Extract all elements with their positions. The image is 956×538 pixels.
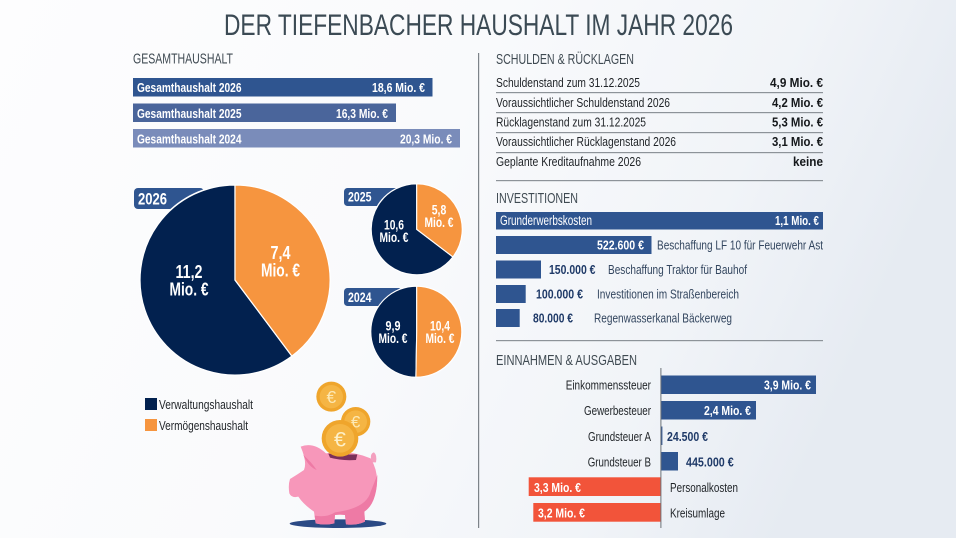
pie chart 2024 xyxy=(344,286,463,378)
bar: Gesamthaushalt 2025: 16,3 Mio. € xyxy=(336,106,388,121)
pie chart 2024: 10,4 xyxy=(430,318,450,334)
row: Einkommensteuer xyxy=(566,376,816,394)
row: Schuldenstand 2025: 4,9 Mio. € xyxy=(770,75,823,90)
row: Voraussichtlicher Rücklagenstand: 3,1 Mio. € xyxy=(772,134,823,149)
bar: Regenwasserkanal: Regenwasserkanal Bäckerweg xyxy=(594,310,732,326)
heading: Schulden und Rücklagen: SCHULDEN & RÜCKLAGEN xyxy=(496,50,634,68)
row: Grundsteuer B: 445.000 € xyxy=(686,454,734,470)
panel: Investitionen xyxy=(496,190,823,327)
bar: Gesamthaushalt 2024 xyxy=(133,129,460,148)
bar: Gesamthaushalt 2026: 18,6 Mio. € xyxy=(372,80,425,95)
pie chart 2025: Mio. € xyxy=(380,229,409,245)
bar: Regenwasserkanal xyxy=(496,309,732,327)
row: Rücklagenstand 2025: 5,3 Mio. € xyxy=(772,114,823,130)
icon: piggy bank with coins: € xyxy=(327,387,337,407)
row: Einkommensteuer: Einkommenssteuer xyxy=(566,378,652,392)
bar: Beschaffung LF 10 xyxy=(496,236,823,254)
row: Gewerbesteuer: Gewerbesteuer xyxy=(584,403,651,418)
row: Voraussichtlicher Schuldenstand: 4,2 Mio. € xyxy=(772,95,823,110)
row: Grundsteuer B: Grundsteuer B xyxy=(588,454,651,470)
bar: Beschaffung Traktor xyxy=(496,260,747,278)
panel: Schulden und Rücklagen xyxy=(496,50,823,169)
legend: Vermögenshaushalt xyxy=(159,418,248,433)
bar: Beschaffung LF 10: 522.600 € xyxy=(597,238,644,252)
heading: Investitionen: INVESTITIONEN xyxy=(496,190,578,207)
row: Personalkosten: 3,3 Mio. € xyxy=(534,480,581,495)
bar: Grunderwerbskosten xyxy=(496,212,823,230)
pie chart 2025: 5,8 xyxy=(432,202,446,218)
row: Kreisumlage: Kreisumlage xyxy=(670,506,725,520)
row: Voraussichtlicher Schuldenstand: Voraussichtlicher Schuldenstand 2026 xyxy=(496,95,670,110)
pie chart 2024: 9,9 xyxy=(386,318,401,334)
pie chart 2026: 11,2 xyxy=(176,262,202,282)
legend: Verwaltungshaushalt xyxy=(159,397,253,412)
divider between columns xyxy=(478,53,479,528)
bar: Investitionen im Straßenbereich xyxy=(496,285,739,303)
legend xyxy=(145,397,253,433)
title: DER TIEFENBACHER HAUSHALT IM JAHR 2026 xyxy=(224,9,733,42)
bar: Grunderwerbskosten: Grunderwerbskosten xyxy=(500,213,592,228)
pie chart 2024: Mio. € xyxy=(378,330,408,346)
bar: Investitionen im Straßenbereich: 100.000 € xyxy=(536,286,583,302)
row: Schuldenstand 2025: Schuldenstand zum 31.12.2025 xyxy=(496,75,640,90)
pie chart 2026: 7,4 xyxy=(270,243,290,263)
row: Grundsteuer A: Grundsteuer A xyxy=(588,429,651,444)
bar: Gesamthaushalt 2026: Gesamthaushalt 2026 xyxy=(137,80,242,95)
row: Voraussichtlicher Schuldenstand xyxy=(496,95,823,110)
year tag 2024: 2024 xyxy=(348,289,372,305)
row: Geplante Kreditaufnahme xyxy=(496,154,823,169)
bar: Grunderwerbskosten: 1,1 Mio. € xyxy=(775,213,819,228)
bar: Gesamthaushalt 2025: Gesamthaushalt 2025 xyxy=(137,106,242,121)
bar: Beschaffung Traktor: 150.000 € xyxy=(549,262,596,277)
heading: Gesamthaushalt: GESAMTHAUSHALT xyxy=(133,50,233,68)
bar: Gesamthaushalt 2026 xyxy=(133,78,432,96)
bar: Gesamthaushalt 2024: Gesamthaushalt 2024 xyxy=(137,132,242,146)
heading: Einnahmen und Ausgaben: EINNAHMEN & AUSGABEN xyxy=(496,352,637,369)
row: Geplante Kreditaufnahme: Geplante Kreditaufnahme 2026 xyxy=(496,154,641,169)
row: Einkommensteuer: 3,9 Mio. € xyxy=(764,378,811,392)
pie chart 2025: 10,6 xyxy=(384,216,404,232)
row: Grundsteuer A: 24.500 € xyxy=(667,429,708,444)
year tag 2025: 2025 xyxy=(348,188,372,204)
bar: Regenwasserkanal: 80.000 € xyxy=(533,310,573,326)
row: Rücklagenstand 2025: Rücklagenstand zum 31.12.2025 xyxy=(496,114,646,130)
row: Gewerbesteuer xyxy=(584,401,756,420)
row: Kreisumlage: 3,2 Mio. € xyxy=(538,506,585,520)
icon: piggy bank with coins: € xyxy=(351,413,361,432)
panel: Gesamthaushalt xyxy=(133,50,460,148)
pie chart 2024: Mio. € xyxy=(426,330,455,346)
pie chart 2025 xyxy=(344,183,463,276)
bar: Beschaffung Traktor: Beschaffung Traktor für Bauhof xyxy=(608,262,747,277)
year tag 2026 xyxy=(134,188,204,209)
bar: Gesamthaushalt 2025 xyxy=(133,104,396,122)
row: Grundsteuer B xyxy=(588,452,734,470)
row: Gewerbesteuer: 2,4 Mio. € xyxy=(704,403,751,418)
pie chart 2026: Mio. € xyxy=(170,280,208,300)
panel: Einnahmen und Ausgaben xyxy=(496,352,816,528)
row: Voraussichtlicher Rücklagenstand xyxy=(496,134,823,149)
row: Voraussichtlicher Rücklagenstand: Voraussichtlicher Rücklagenstand 2026 xyxy=(496,134,676,149)
icon: piggy bank with coins: € xyxy=(334,427,346,451)
year tag 2026: 2026 xyxy=(138,190,167,208)
icon: piggy bank with coins xyxy=(289,382,386,528)
row: Personalkosten xyxy=(529,477,738,496)
bar: Investitionen im Straßenbereich: Investitionen im Straßenbereich xyxy=(597,286,739,302)
pie chart 2026 xyxy=(134,184,331,376)
bar: Beschaffung LF 10: Beschaffung LF 10 für Feuerwehr Ast xyxy=(657,238,823,252)
row: Rücklagenstand 2025 xyxy=(496,114,823,130)
row: Geplante Kreditaufnahme: keine xyxy=(793,154,823,169)
pie chart 2025: Mio. € xyxy=(424,214,454,230)
row: Personalkosten: Personalkosten xyxy=(670,480,738,495)
row: Grundsteuer A xyxy=(588,426,708,445)
pie chart 2026: Mio. € xyxy=(261,260,300,280)
row: Kreisumlage xyxy=(533,503,725,522)
row: Schuldenstand 2025 xyxy=(496,75,823,90)
bar: Gesamthaushalt 2024: 20,3 Mio. € xyxy=(400,132,452,146)
